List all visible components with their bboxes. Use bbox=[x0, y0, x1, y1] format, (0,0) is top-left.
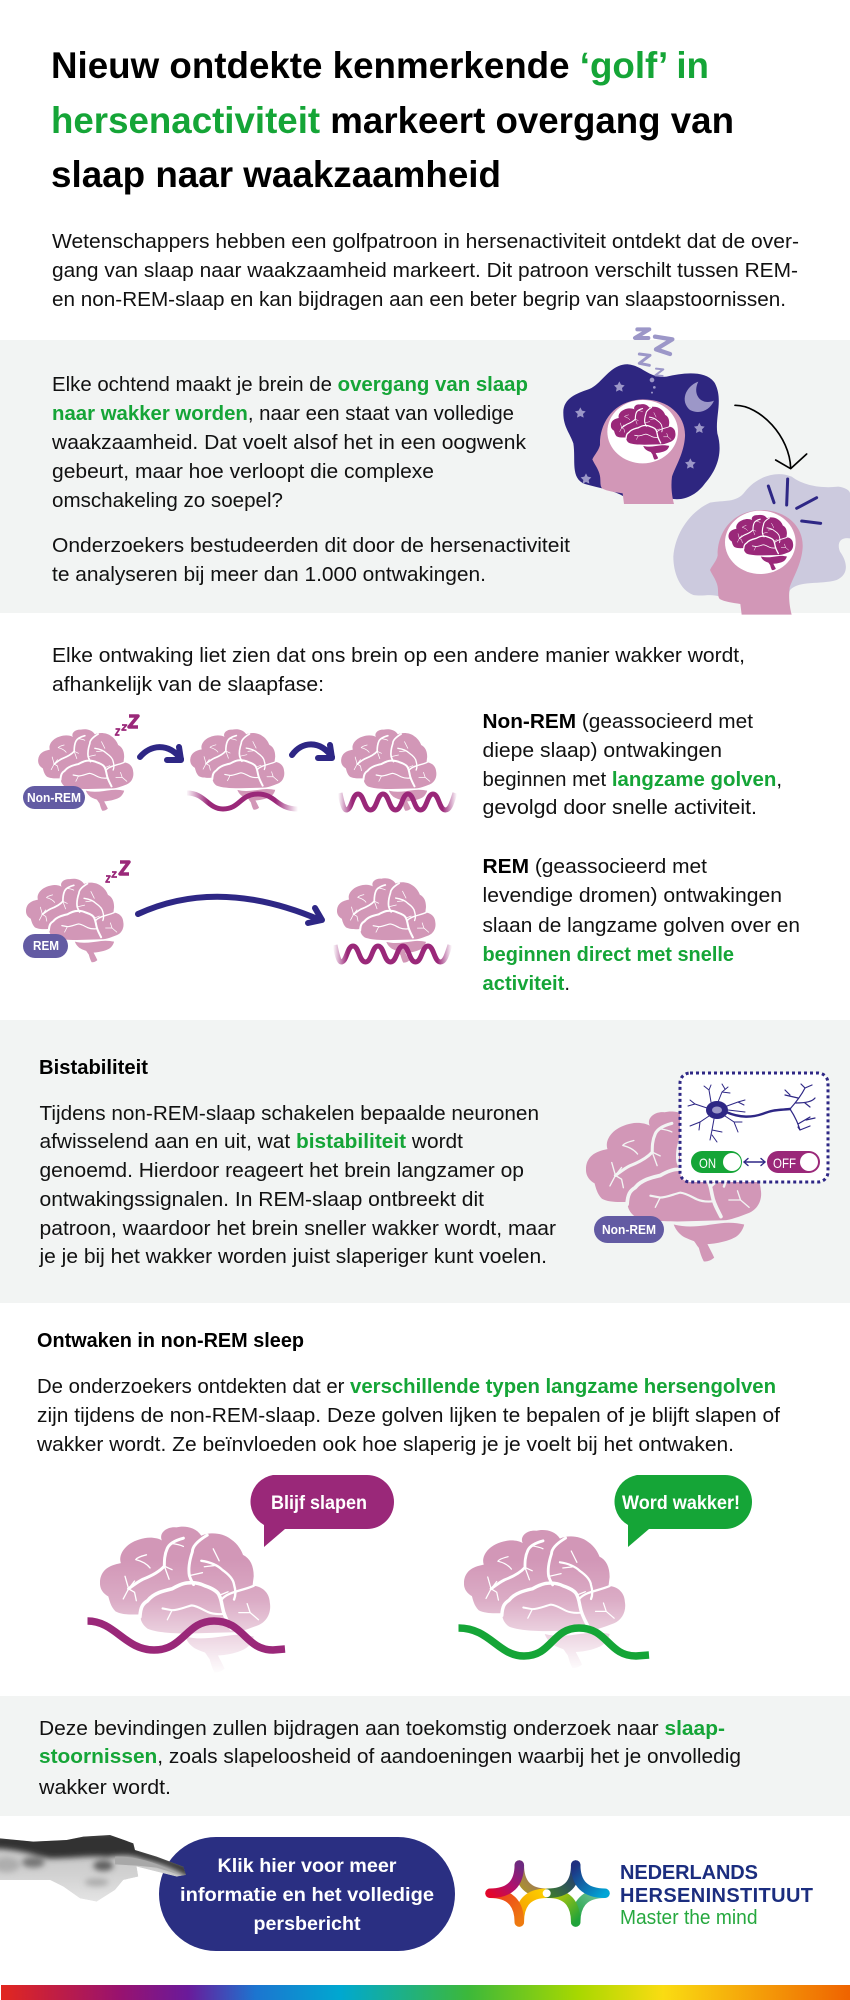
text: morning transition bbox=[51, 373, 570, 586]
long arrow bbox=[138, 897, 322, 923]
intro text: en non-REM-slaap en kan bijdragen aan een beter begrip van slaapstoornissen. bbox=[52, 288, 786, 311]
switch: ON bbox=[691, 1151, 742, 1173]
text: bistability: je je bij het wakker worden juist slaperiger kunt voelen. bbox=[38, 1245, 547, 1268]
text: REM: beginnen direct met snelle bbox=[482, 943, 734, 966]
call to action button: Klik hier voor meer bbox=[218, 1855, 397, 1877]
arrow bbox=[292, 744, 332, 758]
intro text bbox=[52, 230, 799, 311]
arrow bbox=[140, 747, 181, 760]
text: REM: levendige dromen) ontwakingen bbox=[482, 884, 782, 907]
call to action button: informatie en het volledige bbox=[180, 1884, 434, 1906]
logo text: NEDERLANDS bbox=[620, 1862, 758, 1884]
badge: Non-REM: Non-REM bbox=[27, 790, 81, 805]
badge: Non-REM: Non-REM bbox=[602, 1222, 656, 1237]
badge: REM bbox=[23, 934, 68, 958]
text: REM: slaan de langzame golven over en bbox=[482, 914, 800, 937]
text: bistability: Tijdens non-REM-slaap schakelen bepaalde neuronen bbox=[40, 1102, 539, 1125]
switch: OFF bbox=[767, 1151, 820, 1173]
panel: conclusion bbox=[0, 1696, 850, 1816]
call to action button bbox=[159, 1837, 455, 1951]
diagram: non-REM awakening bbox=[23, 716, 455, 811]
fast wave bbox=[335, 945, 450, 962]
stars bbox=[575, 378, 705, 484]
logo: Nederlands Herseninstituut bbox=[490, 1862, 813, 1929]
text: non-REM: beginnen met langzame golven, bbox=[482, 768, 782, 791]
speech bubble: Word wakker! bbox=[622, 1493, 740, 1514]
switch: OFF: OFF bbox=[773, 1155, 796, 1171]
text: non-REM: diepe slaap) ontwakingen bbox=[482, 739, 722, 762]
logo text bbox=[620, 1862, 813, 1929]
text: morning transition: Onderzoekers bestudeerden dit door de hersenactiviteit bbox=[52, 534, 570, 557]
text: morning transition: Elke ochtend maakt je brein de overgang van slaap bbox=[52, 373, 528, 396]
text: bistability: genoemd. Hierdoor reageert het brein langzamer op bbox=[40, 1159, 524, 1182]
wave bbox=[458, 1628, 649, 1656]
heading: waking in non-REM sleep: Ontwaken in non-REM sleep bbox=[37, 1330, 304, 1352]
panel: conclusion: stoornissen, zoals slapeloosheid of aandoeningen waarbij het je onvolledig bbox=[39, 1745, 741, 1768]
logo text: Master the mind bbox=[620, 1907, 758, 1929]
lead-in text: Elke ontwaking liet zien dat ons brein op een andere manier wakker wordt, bbox=[52, 644, 745, 667]
curved arrow bbox=[735, 405, 807, 469]
intro text: gang van slaap naar waakzaamheid markeert. Dit patroon verschilt tussen REM- bbox=[52, 259, 798, 282]
rainbow footer bar bbox=[1, 1985, 850, 2000]
alert rays bbox=[768, 479, 821, 523]
speech bubble bbox=[251, 1475, 394, 1547]
badge: REM: REM bbox=[33, 938, 59, 953]
illustration: brain with neuron switch bbox=[586, 1073, 828, 1261]
speech bubble: Blijf slapen bbox=[271, 1493, 367, 1514]
icon: pointing hand bbox=[0, 1832, 190, 1902]
illustration: sleeping head to awake head bbox=[563, 329, 850, 615]
slow wave bbox=[187, 793, 298, 809]
double arrow bbox=[744, 1158, 765, 1166]
panel: conclusion: Deze bevindingen zullen bijdragen aan toekomstig onderzoek naar slaap- bbox=[39, 1717, 725, 1740]
text: REM: REM (geassocieerd met bbox=[482, 855, 707, 878]
fast wave bbox=[340, 793, 455, 810]
intro text: Wetenschappers hebben een golfpatroon in hersenactiviteit ontdekt dat de over- bbox=[52, 230, 799, 253]
text: REM: activiteit. bbox=[482, 972, 570, 995]
awake cloud bbox=[673, 474, 850, 600]
text: bistability: patroon, waardoor het brein sneller wakker wordt, maar bbox=[40, 1217, 556, 1240]
panel: morning transition bbox=[0, 329, 850, 615]
badge: Non-REM bbox=[23, 786, 85, 809]
panel: bistability bbox=[0, 1020, 850, 1303]
text: slow wave types: zijn tijdens de non-REM-slaap. Deze golven lijken te bepalen of je blijft slapen of bbox=[37, 1404, 780, 1427]
text: morning transition: naar wakker worden, naar een staat van volledige bbox=[52, 402, 514, 425]
title: slaap naar waakzaamheid bbox=[51, 154, 501, 195]
badge: Non-REM bbox=[594, 1216, 664, 1243]
moon bbox=[685, 382, 714, 412]
sleeping cloud bbox=[563, 364, 720, 499]
sleep letters bbox=[106, 862, 129, 882]
wave bbox=[88, 1621, 285, 1650]
text: bistability: ontwakingssignalen. In REM-slaap ontbreekt dit bbox=[40, 1188, 484, 1211]
speech bubble bbox=[615, 1475, 752, 1547]
text: non-REM: gevolgd door snelle activiteit. bbox=[482, 796, 757, 819]
title: Nieuw ontdekte kenmerkende ‘golf’ in bbox=[51, 45, 709, 86]
text: non-REM bbox=[482, 710, 782, 819]
text: slow wave types: De onderzoekers ontdekten dat er verschillende typen langzame hersengolven bbox=[37, 1375, 776, 1398]
title: hersenactiviteit markeert overgang van bbox=[51, 100, 734, 141]
text: morning transition: omschakeling zo soepel? bbox=[52, 489, 283, 512]
text: slow wave types: wakker wordt. Ze beïnvloeden ook hoe slaperig je je voelt bij het ontwaken. bbox=[36, 1433, 734, 1456]
text: bistability bbox=[38, 1102, 556, 1268]
text: REM bbox=[482, 855, 800, 995]
text: bistability: afwisselend aan en uit, wat bistabiliteit wordt bbox=[40, 1130, 463, 1153]
illustration: wake up bbox=[458, 1475, 752, 1672]
call to action button: persbericht bbox=[254, 1913, 361, 1935]
text: non-REM: Non-REM (geassocieerd met bbox=[482, 710, 753, 733]
logo text: HERSENINSTITUUT bbox=[620, 1885, 813, 1907]
diagram: REM awakening bbox=[23, 862, 450, 963]
switch: ON: ON bbox=[699, 1155, 716, 1171]
panel: conclusion: wakker wordt. bbox=[38, 1776, 171, 1799]
lead-in text: afhankelijk van de slaapfase: bbox=[52, 673, 324, 696]
logo mark bbox=[490, 1865, 605, 1922]
sleep letters bbox=[635, 329, 672, 376]
text: morning transition: waakzaamheid. Dat voelt alsof het in een oogwenk bbox=[51, 431, 527, 454]
text: morning transition: gebeurt, maar hoe verloopt die complexe bbox=[52, 460, 434, 483]
neuron bbox=[688, 1084, 815, 1142]
illustration: stay asleep bbox=[88, 1475, 394, 1675]
text: slow wave types bbox=[36, 1375, 780, 1456]
neuron card bbox=[680, 1073, 828, 1182]
sleep letters bbox=[116, 716, 138, 735]
lead-in text bbox=[52, 644, 745, 696]
title bbox=[51, 45, 734, 195]
heading: Bistabiliteit: Bistabiliteit bbox=[39, 1057, 148, 1079]
text: morning transition: te analyseren bij meer dan 1.000 ontwakingen. bbox=[52, 563, 486, 586]
